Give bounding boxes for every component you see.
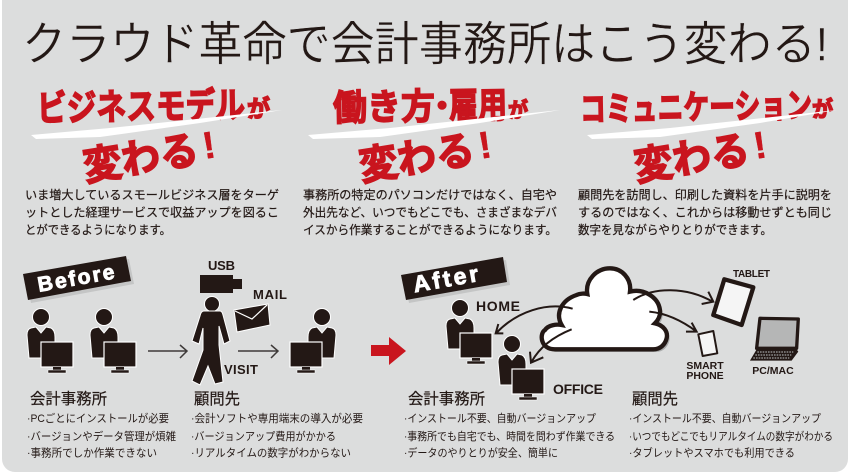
heading: business model: が	[247, 95, 270, 123]
icon: tablet	[713, 279, 753, 325]
icon: home accountant	[446, 300, 492, 364]
text block: before accountant: ·バージョンやデータ管理が煩雑	[27, 429, 176, 443]
text block: before client: ·リアルタイムの数字がわからない	[191, 446, 351, 460]
arrow: before to after	[371, 337, 406, 365]
icon: accountant 2	[90, 308, 136, 373]
text block: after accountant	[404, 390, 615, 460]
text block: after client: ·インストール不要、自動バージョンアップ	[629, 411, 821, 425]
after tag: After	[411, 260, 483, 297]
icon: client	[290, 308, 336, 373]
label: OFFICE: OFFICE	[553, 381, 603, 397]
heading: changes: 変わる	[631, 128, 753, 190]
label: smart phone: PHONE	[686, 370, 724, 382]
heading: changes: 変わる	[356, 128, 478, 190]
heading: changes: !	[475, 124, 495, 168]
heading: changes: !	[750, 124, 770, 168]
label: TABLET: TABLET	[733, 269, 770, 280]
body text: 数字を見ながらやりとりができます。	[578, 222, 772, 237]
text block: before accountant	[27, 390, 176, 460]
arrow: to client	[238, 345, 278, 358]
heading: work style: 働き方	[333, 86, 435, 129]
before tag	[23, 256, 134, 303]
text block: after accountant: 会計事務所	[408, 390, 485, 408]
heading: work style: ・	[427, 90, 457, 124]
icon: cloud	[542, 268, 670, 352]
body text: とができるようになります。	[25, 222, 171, 237]
brush stroke	[587, 110, 837, 139]
panel: work style column	[303, 84, 560, 237]
text block: after accountant: ·データのやりとりが安全、簡単に	[404, 446, 558, 460]
heading: changes: 変わる	[80, 128, 202, 190]
text block: after client	[629, 390, 833, 460]
heading: work style: が	[508, 98, 528, 122]
after tag	[401, 257, 510, 303]
heading: changes: !	[199, 124, 219, 168]
text block: after client: 顧問先	[632, 390, 678, 408]
text block: after client: ·タブレットやスマホでも利用できる	[629, 446, 795, 460]
body text: 外出先など、いつでもどこでも、さまざまなデバ	[303, 204, 557, 220]
arrow: to walker	[148, 345, 187, 358]
text block: before accountant: ·PCごとにインストールが必要	[27, 411, 169, 425]
label: MAIL: MAIL	[253, 287, 287, 302]
body text: 事務所の特定のパソコンだけではなく、自宅や	[303, 187, 557, 202]
label: smart phone: SMART	[686, 360, 724, 372]
text block: before accountant: ·事務所でしか作業できない	[27, 446, 157, 460]
body text	[303, 187, 557, 237]
body text: ットとした経理サービスで収益アップを図るこ	[25, 206, 279, 220]
brush stroke	[308, 110, 560, 139]
text block: after accountant: ·インストール不要、自動バージョンアップ	[404, 411, 596, 425]
label: VISIT: VISIT	[224, 362, 258, 377]
panel: communication column	[578, 87, 837, 237]
arrows: cloud connections	[496, 290, 713, 363]
panel: before diagram	[23, 256, 336, 385]
before tag: Before	[36, 260, 118, 297]
body text: 顧問先を訪問し、印刷した資料を片手に説明を	[578, 187, 832, 202]
body text: いま増大しているスモールビジネス層をターゲ	[25, 188, 279, 202]
icon: laptop	[750, 318, 798, 361]
text block: before accountant: 会計事務所	[30, 390, 107, 408]
icon: office accountant	[498, 336, 544, 400]
icon: envelope	[234, 304, 270, 332]
body text	[578, 187, 832, 237]
text block: before client: ·バージョンアップ費用がかかる	[191, 429, 336, 443]
text block: after accountant: ·事務所でも自宅でも、時間を問わず作業できる	[404, 429, 615, 443]
body text: イスから作業することができるようになります。	[303, 222, 557, 237]
heading: work style	[333, 84, 528, 129]
label: USB: USB	[208, 258, 235, 273]
panel: after diagram	[401, 257, 798, 400]
body text	[25, 188, 279, 237]
label: PC/MAC: PC/MAC	[752, 365, 794, 377]
icon: accountant 1	[27, 308, 73, 373]
text block: before client: 顧問先	[194, 390, 240, 408]
brush stroke	[31, 110, 282, 139]
icon: walking person	[192, 296, 230, 385]
text block: before client: ·会計ソフトや専用端末の導入が必要	[191, 411, 363, 425]
icon: USB stick	[200, 275, 242, 293]
heading: work style: 雇用	[449, 84, 507, 126]
icon: smartphone	[698, 331, 717, 356]
body text: するのではなく、これからは移動せずとも同じ	[578, 206, 832, 220]
heading: business model: ビジネスモデル	[37, 84, 245, 129]
panel: business model column	[25, 84, 282, 237]
label: smart phone	[686, 360, 724, 382]
label: HOME: HOME	[476, 298, 520, 314]
text block: before client	[191, 390, 363, 460]
heading: communication: が	[812, 97, 833, 122]
